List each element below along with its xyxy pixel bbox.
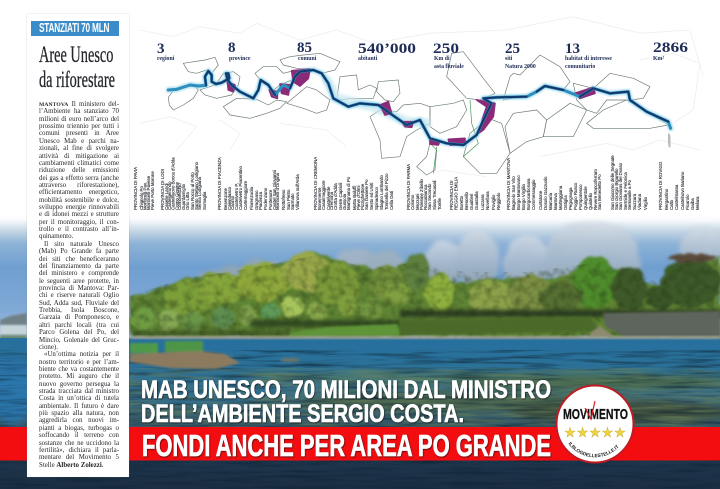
article body text: sostanze che ne uccidono la — [39, 440, 119, 447]
purple protected areas — [227, 69, 595, 145]
municipality lists by province: Brescello — [464, 191, 469, 210]
municipality lists by province: Monticelli Pav. — [142, 182, 148, 210]
municipality lists by province: Casalmaggiore — [321, 180, 326, 210]
article body text: fertilità», dichiara il parla- — [39, 447, 119, 454]
municipality lists by province: Motta Baluffi — [352, 186, 357, 210]
stat: habitat: comunitario — [565, 64, 595, 70]
article body text: pianti a biogas, turbogas o — [39, 425, 119, 432]
municipality lists by province: Cella Dati — [389, 191, 394, 210]
municipality lists by province: Melara — [695, 196, 700, 210]
municipality lists by province: Somaglia — [202, 191, 207, 210]
municipality lists by province: Besenzone — [223, 187, 228, 210]
headline: FONDI ANCHE PER AREA PO GRANDE — [142, 428, 551, 463]
municipality lists by province: Gussola — [342, 193, 347, 210]
municipality lists by province: Crotta d'Adda — [333, 183, 338, 210]
municipality lists by province: Pieve d'Olmi — [356, 185, 361, 210]
article body text: attraverso riforestazione), — [39, 182, 119, 189]
stat: habitat: 13 — [565, 41, 580, 57]
municipality lists by province: Roccabianca — [423, 184, 428, 210]
municipality lists by province: Poviglio — [491, 194, 496, 210]
stat: abitanti: abitanti — [358, 56, 378, 62]
municipality lists by province: San Giacomo delle Segnate — [610, 155, 615, 210]
article body text: Mincio, Golenale del Gruc- — [39, 336, 119, 344]
municipality lists by province: Caorso — [230, 195, 235, 210]
municipality lists by province: Bagnolo San Vito — [511, 176, 516, 210]
municipality lists by province: PROVINCIA DI PARMA — [406, 164, 411, 210]
municipality lists by province: Torricella del Pizzo — [384, 173, 389, 210]
article body text: ambientale. Il futuro è dare — [39, 403, 119, 410]
article body text: comuni presenti in Aree — [39, 130, 119, 137]
municipality lists by province: Santo Stefano Lodigiano — [194, 161, 199, 210]
municipality lists by province: Castelvetro P. — [234, 183, 239, 210]
stat: km di asta fluviale: asta fluviale — [434, 64, 464, 70]
municipality lists by province: Poggio Rusco — [573, 182, 578, 210]
municipality lists by province: Castel San Giovanni — [272, 170, 277, 210]
red band — [0, 427, 720, 460]
municipality lists by province: PROVINCIA DI LODI — [160, 169, 165, 210]
municipality lists by province: Ficarolo — [685, 194, 690, 210]
municipality lists by province: Virgilio — [643, 196, 648, 210]
article body text: Sud, Adda sud, Fluviale del — [39, 300, 119, 307]
river: floodplain, protected areas and channel — [168, 69, 703, 146]
municipality lists by province: San Rocco al Porto — [190, 172, 195, 210]
faint background outlines — [140, 17, 703, 177]
article body text: Trebbia, Isola Boscone, — [39, 307, 119, 314]
municipality lists by province: Pegognaga — [568, 187, 573, 210]
stat: km quadrati — [653, 40, 689, 62]
municipality lists by province: Colorno — [410, 194, 415, 210]
article body text: Parco Golena del Po, del — [39, 329, 119, 336]
article body text: MANTOVA Il ministero del- — [39, 101, 119, 108]
municipality lists by province: Castelnovo Bariano — [680, 171, 685, 210]
pale bare tree crowns — [194, 220, 720, 296]
municipality lists by province: Novellara — [485, 191, 490, 210]
municipality lists by province: Luzzara — [480, 194, 485, 210]
dark foliage at the base of the trees — [130, 310, 720, 335]
municipality lists by province: Sermide e Felonica — [623, 172, 628, 210]
article body text: Il sito naturale Unesco — [44, 241, 119, 248]
municipality lists by province: Quingentole — [583, 186, 588, 210]
municipality lists by province: Viadana — [637, 193, 642, 210]
stat: siti Natura 2000 — [505, 41, 536, 70]
municipality lists by province: Motteggiana — [558, 185, 563, 210]
article body text: riduzione delle emissioni — [39, 167, 119, 174]
article body text: cambiamenti climatici come — [39, 160, 119, 167]
stat: habitat: habitat di interesse — [565, 56, 612, 62]
municipality lists by province: San Pietro — [286, 189, 291, 210]
article body text: sviluppo energie rinnovabili — [39, 204, 119, 211]
stat: km quadrati: 2866 — [653, 40, 689, 56]
stat: province: province — [229, 56, 251, 62]
municipality lists by province: PROVINCIA DI PAVIA — [133, 167, 138, 210]
municipality lists by province: Castelverde — [326, 186, 331, 210]
article body text: provincia di Mantova: Par- — [39, 285, 119, 292]
municipality lists by province: Cremona — [329, 191, 334, 210]
stat: km di asta fluviale: 250 — [433, 41, 459, 57]
municipality lists by province: Commessaggio — [531, 179, 536, 210]
article body text: prossimo triennio per tutti i — [39, 123, 119, 130]
municipality lists by province: Senna Lodigiana — [197, 176, 202, 210]
foreground rocks and grass tufts — [130, 341, 300, 369]
stat: km di asta fluviale — [433, 41, 464, 70]
stat: regioni: 3 — [157, 41, 164, 57]
water ripples — [0, 350, 720, 489]
tree mass — [130, 252, 720, 338]
article body text: l’Ambiente ha stanziato 70 — [39, 108, 119, 115]
municipality lists by province — [133, 155, 700, 210]
stat: province — [228, 40, 251, 62]
article body text: più spazio alla natura, non — [39, 410, 119, 417]
municipality lists by province: San Secondo — [427, 183, 432, 210]
municipality lists by province: Orio Litta — [185, 192, 190, 210]
municipality lists by province: Chignolo Po — [139, 186, 144, 210]
municipality lists by province: Gragnano — [254, 190, 259, 210]
article body text: «Un’ottima notizia per il — [44, 351, 119, 358]
article body text: trollo e il contrasto all’in- — [39, 226, 119, 233]
kicker label: STANZIATI 70 MLN — [39, 21, 109, 35]
municipality lists by province: Torrile — [437, 197, 442, 210]
municipality lists by province: Mezzani — [415, 194, 420, 210]
municipality lists by province: Reggiolo — [496, 192, 501, 210]
municipality lists by province: Borgo Mantovano — [516, 175, 521, 210]
municipality lists by province: Borgo Virgilio — [521, 183, 526, 210]
municipality lists by province: Calto — [669, 199, 674, 210]
municipality lists by province: Pontenure — [268, 189, 273, 210]
municipality lists by province: Corno Giovine — [174, 181, 180, 210]
water — [0, 338, 720, 489]
article body text: altri parchi locali (tra cui — [39, 322, 119, 329]
municipality lists by province: San Daniele Po — [364, 179, 369, 210]
municipality lists by province: PROVINCIA DI — [449, 180, 454, 210]
article body text: cione). — [39, 344, 58, 351]
municipality lists by province: Stagno Lombardo — [379, 175, 384, 210]
municipality lists by province: Rottofreno — [281, 189, 286, 210]
article body text: milioni di euro nell’arco del — [39, 116, 119, 123]
article body text: mentare del Movimento 5 — [39, 454, 119, 461]
article body text: nostro territorio e per l’am- — [39, 359, 119, 366]
municipality lists by province: Cortemaggiore — [243, 180, 248, 210]
article body text: efficientamento energetico, — [39, 189, 119, 196]
article title: da riforestare — [39, 66, 115, 92]
logo: Movimento 5 Stelle — [556, 384, 634, 464]
municipality lists by province: Sissa Trecasali — [432, 180, 437, 210]
stat: abitanti — [358, 41, 416, 62]
municipality lists by province: Pieve Porto Morone — [150, 171, 155, 210]
headline — [141, 376, 551, 463]
municipality lists by province: Sesto ed Uniti — [369, 183, 374, 210]
article title — [39, 42, 115, 92]
article body text: nuovo governo persegua la — [39, 381, 119, 388]
logo: Movimento 5 Stelle: ★★★★★ — [564, 425, 626, 441]
municipality lists by province: Castelgerundo — [167, 181, 172, 210]
panel: newspaper article — [27, 14, 129, 477]
municipality lists by province: Guardamiglio — [181, 183, 186, 210]
municipality lists by province: Gaiba — [690, 198, 695, 210]
municipality lists by province: PROVINCIA DI MANTOVA — [506, 158, 511, 210]
stat: km quadrati: Km² — [653, 56, 664, 62]
article body text: Garzaia di Pomponesco, e — [39, 314, 119, 321]
municipality lists by province: Castelvetro Piacentino — [238, 166, 243, 210]
municipality lists by province: PROVINCIA DI ROVIGO — [658, 161, 663, 210]
foliage texture — [130, 250, 720, 338]
municipality lists by province: Polesine Zibello — [419, 178, 424, 210]
map: Po river basin — [133, 17, 703, 210]
article body text: zionali, al fine di svolgere — [39, 145, 119, 152]
article body text: e di idonei mezzi e strutture — [39, 211, 119, 218]
stat: comuni — [297, 40, 317, 62]
municipality lists by province: PROVINCIA DI PIACENZA — [217, 157, 222, 210]
municipality lists by province: Martignana di Po — [346, 176, 351, 210]
municipality lists by province: Marcaria — [548, 192, 553, 210]
municipality lists by province: Castelnuovo Bocca d'Adda — [170, 157, 176, 210]
municipality lists by province: San Giovanni del Dosso — [618, 162, 623, 210]
municipality lists by province: Ostiglia — [563, 195, 568, 210]
article body text: le seguenti aree protette, in — [39, 278, 119, 285]
article body text: Stelle Alberto Zolezzi. — [39, 462, 104, 469]
municipality lists by province: Piacenza — [258, 191, 263, 210]
headline: DELL’AMBIENTE SERGIO COSTA. — [141, 400, 464, 428]
municipality lists by province: Sarmato — [290, 193, 295, 210]
municipality lists by province: Gerre Caprioli — [338, 183, 343, 210]
stat: regioni — [157, 41, 175, 62]
stat: comuni: comuni — [298, 56, 317, 62]
municipality lists by province: Revere Roncoferraro — [593, 168, 598, 210]
article title: Aree Unesco — [39, 42, 113, 68]
municipality lists by province: San Giorgio Bigarello — [614, 168, 619, 210]
article body text: dei gas a effetto serra (anche — [39, 175, 119, 182]
stat: km di asta fluviale: Km di — [434, 56, 450, 62]
article body text — [39, 101, 119, 469]
municipality lists by province: Fiorenzuola — [249, 187, 254, 210]
article body text: soffocando il terreno con — [39, 432, 119, 439]
municipality lists by province: Quistello — [588, 192, 593, 210]
headline: MAB UNESCO, 70 MILIONI DAL MINISTRO — [141, 376, 551, 404]
distant hills at the left edge — [0, 313, 27, 326]
municipality lists by province: Guastalla — [474, 191, 479, 210]
municipality lists by province: Calendasco — [227, 186, 232, 210]
article body text: biente che va costantemente — [39, 366, 119, 373]
article body text: aggredirla con nuovi im- — [39, 417, 119, 424]
article body text: quinamento. — [39, 233, 73, 240]
stat: siti Natura 2000: Natura 2000 — [505, 64, 536, 70]
municipality lists by province: Monticelli d'Ongina — [275, 172, 280, 210]
stat: siti Natura 2000: siti — [505, 56, 513, 62]
municipality lists by province: Bergantino — [664, 188, 669, 210]
photo: river landscape background — [0, 215, 720, 489]
logo: Movimento 5 Stelle: ILBLOGDELLESTELLE.IT — [568, 442, 618, 458]
article body text: del finanziamento da parte — [39, 263, 119, 270]
stat: abitanti: 540’000 — [358, 41, 416, 57]
statistics row — [157, 40, 689, 70]
municipality lists by province: Cornovecchio — [177, 183, 182, 210]
logo: Movimento 5 Stelle: MOVIMENTO — [563, 406, 628, 423]
municipality lists by province: Borgocarbonara — [526, 178, 531, 210]
stat: siti Natura 2000: 25 — [505, 41, 520, 57]
article body text: attività di mitigazione ai — [39, 153, 119, 160]
article body text: mobilità sostenibile e dolce, — [39, 197, 119, 204]
municipality lists by province: Monticelli Pavese — [146, 175, 151, 210]
municipality lists by province: Villanova sull'Arda — [295, 174, 300, 210]
municipality lists by province: Caselle Landi — [164, 183, 169, 210]
province outlines — [168, 53, 437, 175]
article body text: protetto. Mi auguro che il — [39, 373, 119, 380]
municipality lists by province: Gualtieri — [469, 194, 474, 210]
article body text: Costa in un’ottica di tutela — [39, 395, 119, 402]
municipality lists by province: San Benedetto Po — [597, 174, 602, 210]
municipality lists by province: Suzzara — [632, 193, 637, 210]
article body text: del ministero e comprende — [39, 270, 119, 277]
article body text: Unesco Mab e parchi na- — [39, 138, 119, 145]
municipality lists by province: Curtatone — [538, 190, 543, 210]
municipality lists by province: Serravalle a Po — [627, 179, 632, 210]
stat: habitat — [565, 41, 612, 70]
municipality lists by province: Bonemerse — [317, 187, 322, 210]
article body text: per il monitoraggio, il con- — [39, 219, 119, 226]
municipality lists by province: Pizzighettone — [360, 183, 365, 210]
municipality lists by province: Mantova — [553, 193, 558, 210]
article body text: strada tracciata dal ministro — [39, 388, 119, 395]
municipality lists by province: Pomponesco — [578, 184, 583, 210]
stat: comuni: 85 — [297, 40, 312, 56]
municipality lists by province: Castelmassa — [674, 184, 679, 210]
municipality lists by province: Podenzano — [263, 187, 268, 210]
municipality lists by province: Boretto — [459, 195, 464, 210]
article body text: chi e riserve naturali Oglio — [39, 292, 119, 299]
municipality lists by province: REGGIO EMILIA — [454, 177, 458, 210]
municipality lists by province: Dosolo Gazzuolo — [543, 176, 548, 210]
stat: regioni: regioni — [157, 56, 175, 62]
municipality lists by province: PROVINCIA DI CREMONA — [313, 157, 318, 210]
stat: province: 8 — [228, 40, 236, 56]
grass bank and stone wall — [290, 324, 400, 337]
municipality lists by province: Spinadesco — [374, 186, 379, 210]
article body text: (Mab) Po Grande fa parte — [39, 248, 119, 255]
article body text: dei siti che beneficeranno — [39, 256, 119, 263]
